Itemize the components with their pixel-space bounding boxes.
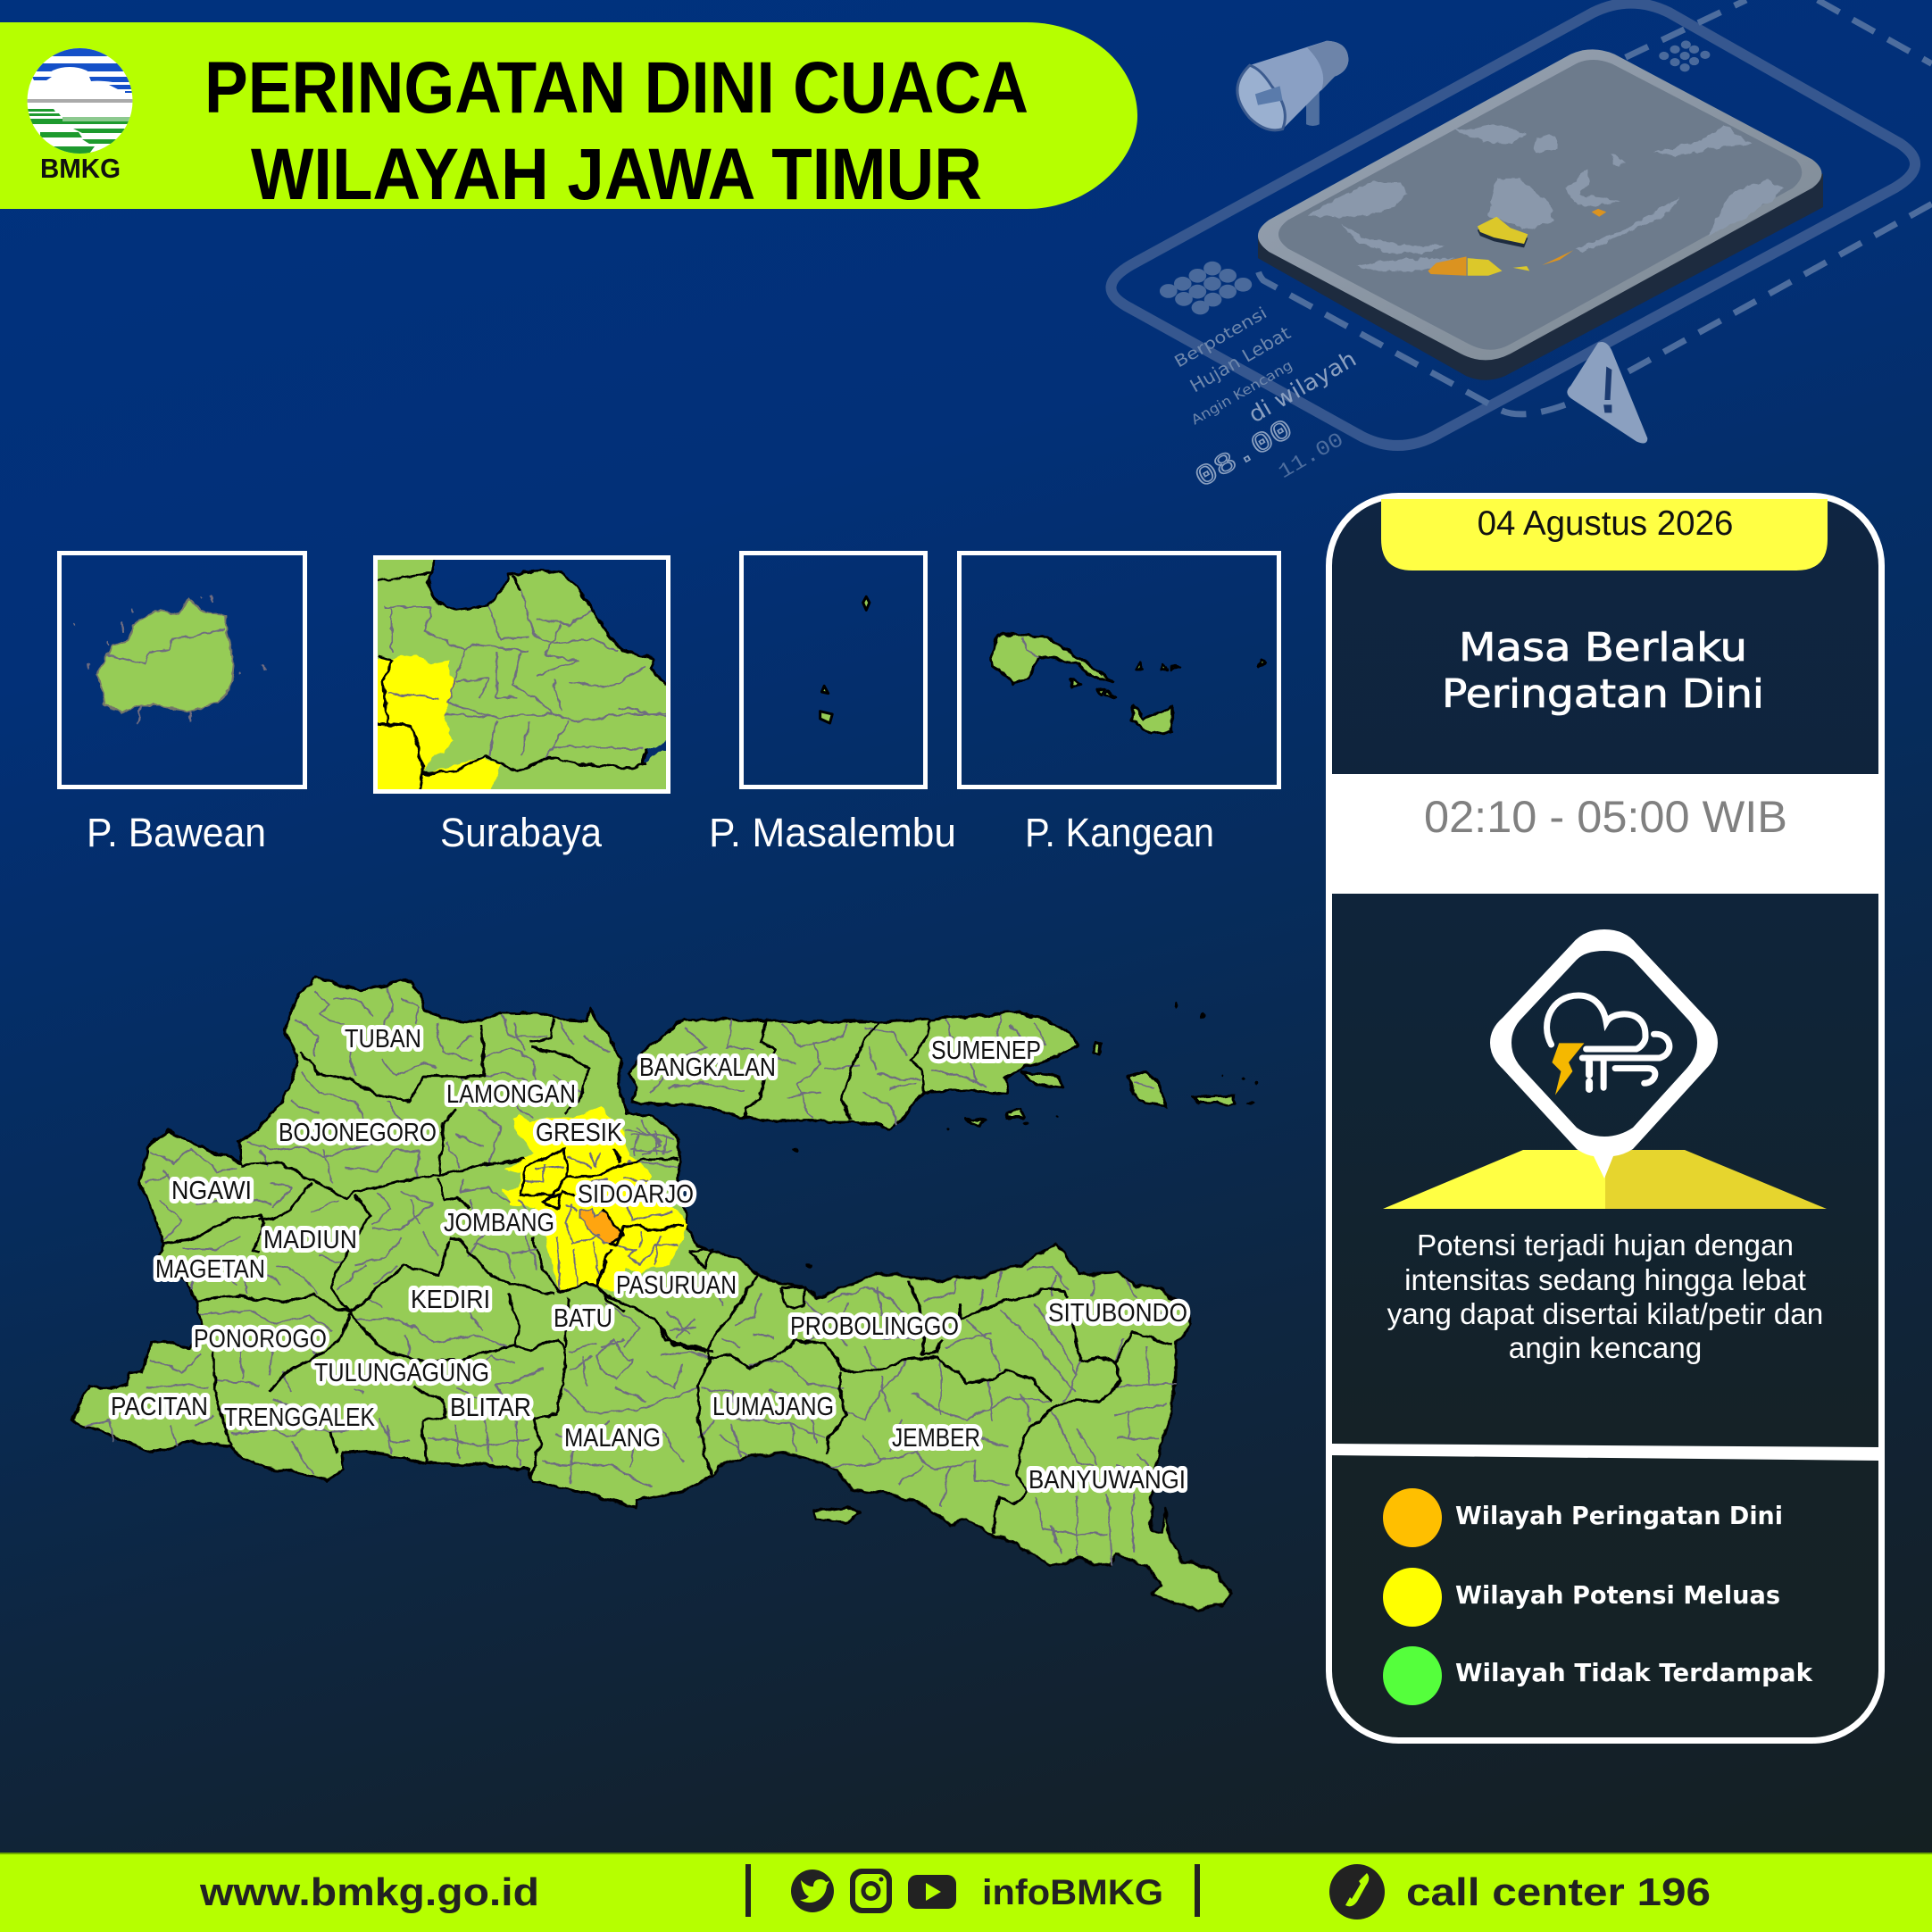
map: warning-extent regions (503, 1107, 689, 1312)
map: land and borders (73, 978, 1259, 1610)
illustration: tablet screen (1278, 60, 1802, 350)
map: district borders east (668, 1265, 1176, 1566)
icon: weather pin (1490, 929, 1718, 1178)
logo: BMKG: BMKG (40, 153, 121, 184)
map: regency labels: BATU (554, 1304, 612, 1333)
map: regency labels: LUMAJANG (712, 1393, 834, 1421)
website: www.bmkg.go.id (199, 1870, 539, 1914)
illustration: dashed path (1258, 0, 1932, 414)
illustration: dot grid right (1659, 40, 1710, 71)
map: regency labels: JOMBANG (444, 1209, 554, 1237)
icon: youtube (908, 1875, 956, 1909)
map: regency labels: TUBAN (345, 1025, 421, 1053)
illustration: rotated caption text: Angin Kencang (1188, 357, 1295, 428)
inset: P. Kangean (959, 554, 1278, 787)
title: WILAYAH JAWA TIMUR (251, 134, 982, 215)
description text (1387, 1229, 1823, 1365)
map: Madura island (629, 1012, 1079, 1128)
illustration: rounded frame outline (1111, 4, 1915, 446)
legend (1383, 1488, 1813, 1705)
icon: yellow base plane (1383, 1150, 1827, 1209)
map: regency labels: NGAWI (171, 1177, 252, 1205)
inset: P. Masalembu (741, 554, 925, 787)
map: East Java (73, 978, 1259, 1610)
illustration: rotated caption text: Berpotensi (1171, 304, 1270, 371)
title: PERINGATAN DINI CUACA (204, 47, 1028, 129)
footer bar (0, 1853, 1932, 1932)
map: district lines in warning area (524, 1119, 679, 1293)
inset: P. Bawean (59, 554, 305, 787)
map: regency labels: SIDOARJO (578, 1180, 694, 1209)
map: regency labels: KEDIRI (411, 1286, 490, 1314)
map: regency labels: BANYUWANGI (1028, 1466, 1186, 1495)
map: regency labels: MADIUN (263, 1226, 357, 1254)
inset captions: P. Bawean (87, 810, 266, 855)
map: district borders west (87, 987, 714, 1486)
illustration: rotated caption text: Hujan Lebat (1186, 321, 1295, 396)
map: regency labels: MALANG (564, 1424, 661, 1453)
map: regency labels: BOJONEGORO (279, 1119, 437, 1147)
inset captions (87, 810, 1214, 855)
divider bars (745, 1864, 1200, 1917)
time band: 02:10 - 05:00 WIB (1424, 792, 1787, 842)
description text: intensitas sedang hingga lebat (1404, 1264, 1806, 1297)
map: regency labels: PROBOLINGGO (790, 1312, 959, 1341)
inset captions: P. Masalembu (709, 810, 956, 855)
map: regency labels: SUMENEP (931, 1037, 1041, 1065)
map: small islands (792, 1000, 1259, 1523)
illustration: highlighted provinces (1428, 209, 1606, 276)
map: regency labels: PACITAN (111, 1393, 208, 1421)
illustration: isometric tablet with map (1111, 0, 1932, 495)
map: regency labels: SITUBONDO (1048, 1299, 1187, 1328)
title (204, 47, 1028, 215)
legend: Wilayah Peringatan Dini (1455, 1501, 1783, 1530)
call center: call center 196 (1406, 1870, 1711, 1914)
icon: phone (1329, 1864, 1385, 1920)
legend: Wilayah Potensi Meluas (1455, 1580, 1780, 1610)
map: warning region (orange) (580, 1208, 623, 1244)
icon: cloud and wind (1547, 995, 1670, 1087)
map: regency labels: PONOROGO (194, 1325, 327, 1353)
card background and border (1328, 496, 1882, 1741)
map: western Java (73, 978, 729, 1507)
map: regency labels: PASURUAN (616, 1271, 737, 1300)
map: regency lines in warning area (520, 1149, 685, 1312)
description text: angin kencang (1509, 1332, 1702, 1365)
icon: lightning bolt (1552, 1043, 1584, 1095)
header banner (0, 22, 1137, 215)
illustration: tablet body (1258, 174, 1823, 380)
time band (1332, 774, 1878, 894)
map: regency borders east (659, 1249, 1171, 1534)
illustration: rotated caption text: 08.00 (1189, 413, 1299, 495)
map: regency labels: BLITAR (450, 1394, 531, 1422)
map: regency labels: TRENGGALEK (224, 1403, 376, 1432)
map: regency labels: BANGKALAN (639, 1053, 776, 1082)
divider (1332, 1444, 1878, 1461)
illustration: rotated caption text: 11.00 (1275, 429, 1348, 484)
map: regency labels: LAMONGAN (446, 1080, 576, 1109)
description text: yang dapat disertai kilat/petir dan (1387, 1298, 1823, 1331)
inset: Surabaya (367, 556, 679, 793)
icon: warning triangle (1567, 342, 1647, 443)
map: regency labels: JEMBER (892, 1424, 980, 1453)
illustration: map land masses (1307, 124, 1785, 271)
icon: instagram (850, 1869, 892, 1913)
date tab (1381, 499, 1828, 570)
map: regency borders west (164, 1020, 714, 1478)
heading: validity period: Masa Berlaku (1459, 625, 1747, 670)
legend: Wilayah Tidak Terdampak (1455, 1658, 1813, 1687)
panel: island insets (59, 554, 1278, 855)
illustration: rotated caption text (1171, 304, 1361, 495)
icon: twitter (791, 1870, 834, 1912)
map: regency labels: MAGETAN (155, 1255, 265, 1284)
heading: validity period: Peringatan Dini (1442, 671, 1764, 717)
illustration: rotated caption text: di wilayah (1245, 346, 1361, 428)
description text: Potensi terjadi hujan dengan (1417, 1229, 1794, 1262)
panel: warning information card (1328, 496, 1882, 1741)
illustration: dot grid left (1160, 262, 1252, 314)
date tab: 04 Agustus 2026 (1478, 504, 1733, 543)
map: regency labels (111, 1025, 1187, 1495)
icon: rain dots (1586, 1062, 1593, 1089)
inset captions: P. Kangean (1025, 810, 1214, 855)
logo: BMKG (27, 48, 134, 184)
map: eastern Java (689, 1234, 1231, 1610)
icon: megaphone (1237, 41, 1348, 130)
map: regency labels: TULUNGAGUNG (314, 1359, 489, 1387)
social handle: infoBMKG (982, 1873, 1163, 1912)
heading: validity period (1442, 625, 1764, 717)
map: regency labels: GRESIK (536, 1119, 623, 1147)
inset captions: Surabaya (440, 810, 603, 855)
illustration: tablet frame (1258, 49, 1821, 360)
